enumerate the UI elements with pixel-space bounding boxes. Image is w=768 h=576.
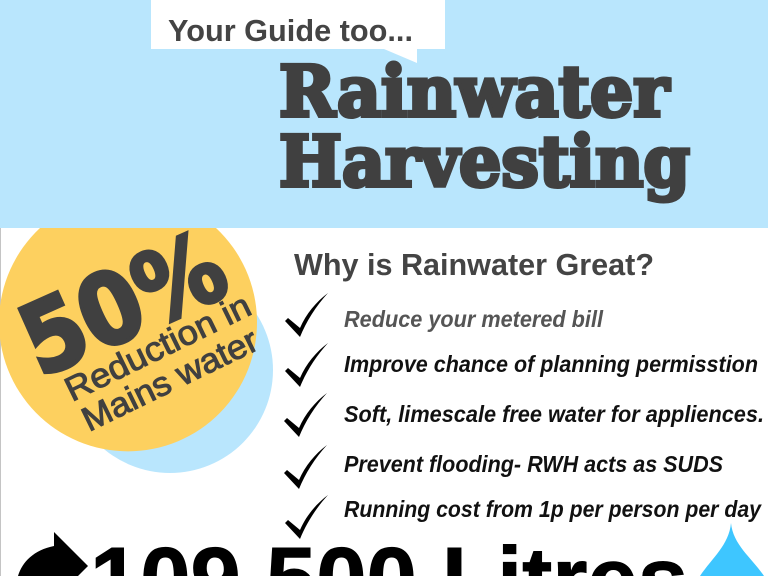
callout text: Mains water — [76, 321, 264, 439]
title: Harvesting — [279, 120, 690, 203]
speech bubble: your guide — [151, 0, 445, 63]
benefit 4: Prevent flooding- RWH acts as SUDS — [344, 451, 724, 477]
benefit 4 — [284, 445, 724, 489]
callout text: Reduction in — [59, 286, 257, 409]
benefit 2 — [285, 343, 758, 387]
title: Rainwater — [279, 50, 670, 133]
benefit 3 — [284, 393, 764, 437]
benefit 1: Reduce your metered bill — [344, 306, 604, 332]
benefit 1 — [285, 293, 604, 337]
icon: arrow — [18, 532, 88, 576]
speech bubble: your guide: Your Guide too... — [168, 13, 413, 48]
callout figure: 50%: 50% — [3, 210, 243, 400]
title — [279, 50, 690, 203]
benefits list — [284, 293, 764, 539]
benefit 5 — [285, 495, 762, 539]
heading: why is rainwater great: Why is Rainwater Great? — [294, 247, 654, 282]
header panel — [0, 0, 768, 228]
callout text — [59, 286, 264, 439]
icon: water drop — [700, 523, 764, 576]
callout: 50% reduction in mains water — [0, 210, 273, 473]
